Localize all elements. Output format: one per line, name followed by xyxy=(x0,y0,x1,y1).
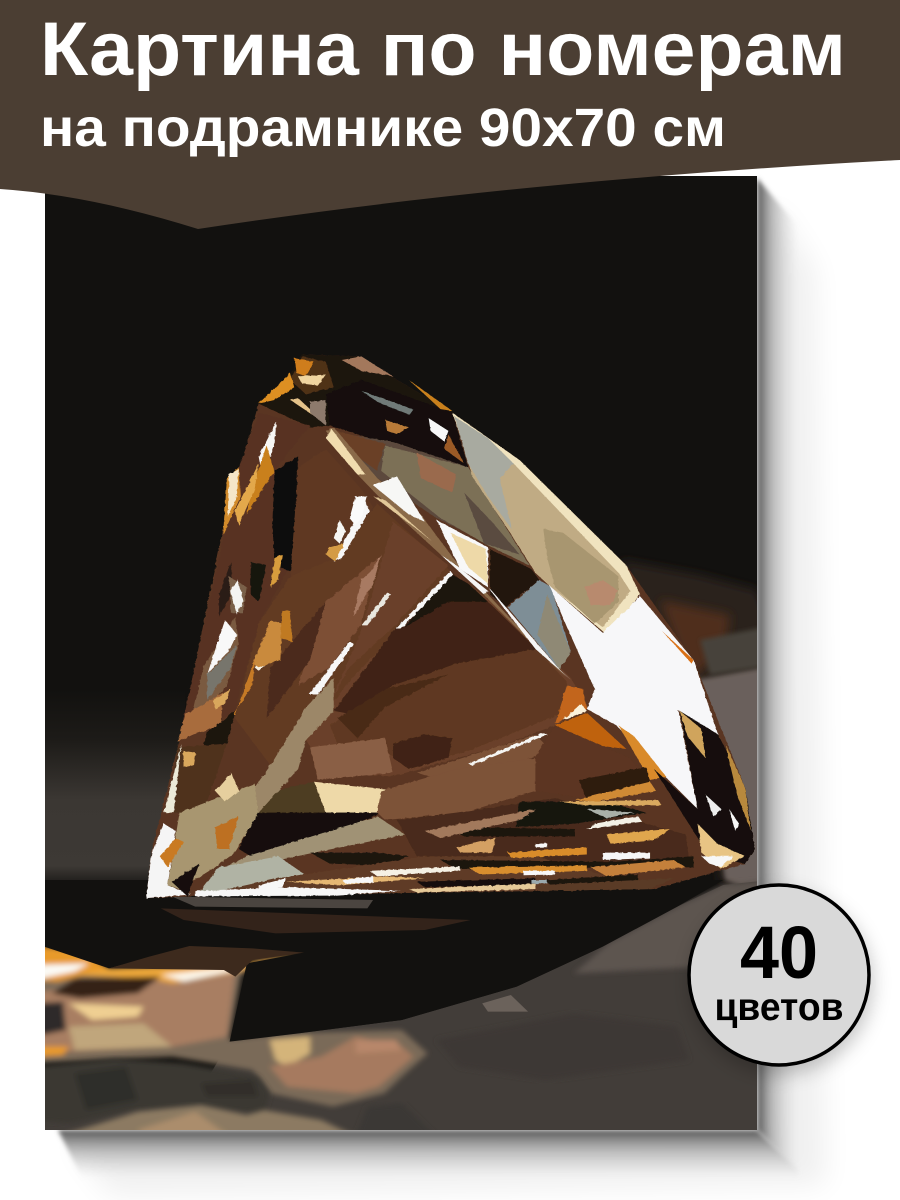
table surface right xyxy=(624,560,757,884)
large pavilion facet: beige xyxy=(452,413,640,635)
horizontal streaks xyxy=(195,800,733,896)
diagonal white ridge xyxy=(326,427,571,680)
header banner xyxy=(0,0,900,229)
diamond silhouette xyxy=(146,355,755,898)
title: Картина по номерам xyxy=(40,7,846,92)
highlight lines xyxy=(309,496,571,773)
subtitle: на подрамнике 90х70 см xyxy=(40,98,726,158)
diamond xyxy=(146,355,755,898)
badge number: 40 xyxy=(740,911,818,994)
canvas shadow xyxy=(58,178,825,1195)
badge: 40 colours xyxy=(689,885,869,1065)
central dark facet xyxy=(306,522,587,785)
painting xyxy=(34,176,775,1137)
left outer facets xyxy=(164,413,452,813)
right tip facets xyxy=(654,711,755,869)
badge label: цветов xyxy=(714,986,844,1029)
table surface left xyxy=(45,727,181,880)
upper khaki facet xyxy=(330,429,529,565)
dark band on table xyxy=(34,1058,270,1123)
table foreground, shadow and reflections xyxy=(34,880,769,1137)
orange edges xyxy=(527,631,694,802)
reflections xyxy=(34,945,428,1107)
white highlight xyxy=(549,585,718,809)
lower reflections xyxy=(68,1102,376,1130)
crown facets xyxy=(259,355,516,558)
cast shadow xyxy=(34,880,723,1042)
lower pavilion facets xyxy=(146,678,690,898)
